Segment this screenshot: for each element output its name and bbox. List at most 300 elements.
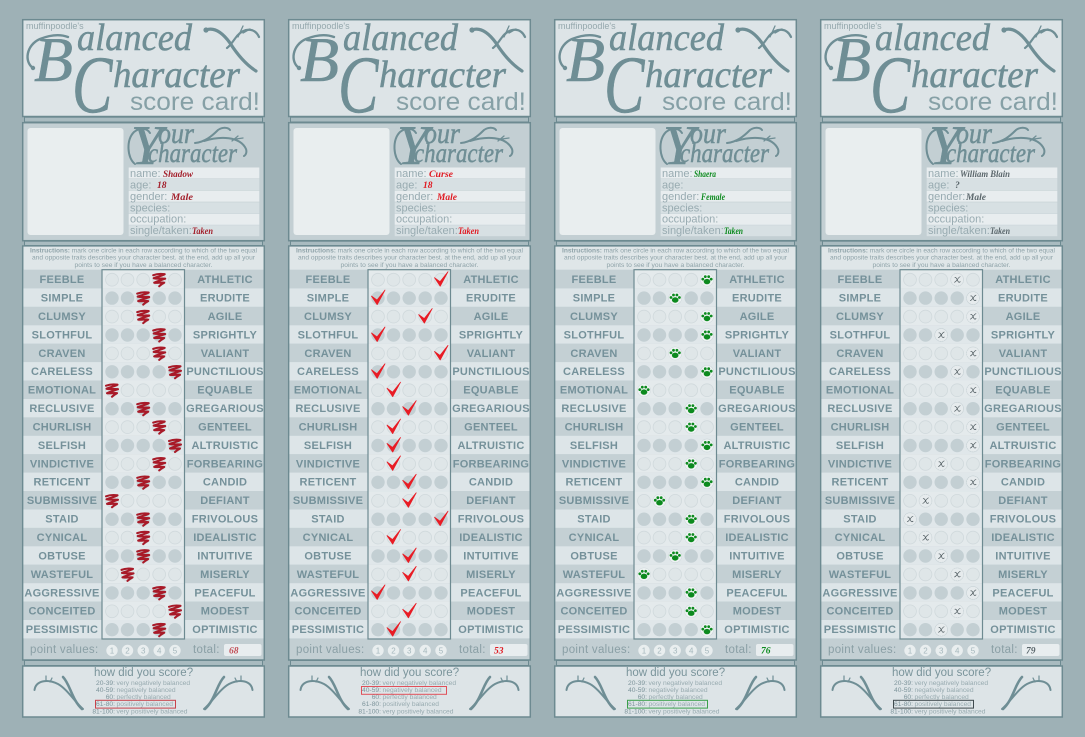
row: SIMPLE ERUDITE: ERUDITE <box>200 293 250 305</box>
score ranges: 60: <box>638 694 647 701</box>
row: CHURLISH GENTEEL: GENTEEL <box>198 422 252 434</box>
character fields: species: <box>662 202 702 214</box>
title: Balanced Character <box>28 17 240 130</box>
score ranges <box>358 680 456 715</box>
instructions: and opposite traits describes your character best. at the end, add up all your <box>298 255 521 262</box>
icon: left flourish <box>832 676 881 709</box>
row: CHURLISH GENTEEL: GENTEEL <box>996 422 1050 434</box>
row: CONCEITED MODEST <box>289 602 530 620</box>
row: CARELESS PUNCTILIOUS: PUNCTILIOUS <box>452 366 530 378</box>
score ranges: 60: <box>106 694 115 701</box>
character fields: name: <box>662 168 693 180</box>
row: CLUMSY AGILE: AGILE <box>1006 311 1040 323</box>
row: WASTEFUL MISERLY: WASTEFUL <box>829 569 891 581</box>
character fields: age: <box>928 180 949 192</box>
row: SLOTHFUL SPRIGHTLY <box>289 325 530 344</box>
subtitle: score card!: score card! <box>396 88 526 116</box>
row: CLUMSY AGILE <box>821 307 1062 325</box>
row: CARELESS PUNCTILIOUS: CARELESS <box>297 366 359 378</box>
row: SUBMISSIVE DEFIANT: SUBMISSIVE <box>825 495 895 507</box>
row: SUBMISSIVE DEFIANT <box>289 491 530 510</box>
icon: header flourish <box>1001 26 1057 71</box>
point values and total: 1 <box>642 646 647 656</box>
row: SLOTHFUL SPRIGHTLY: SPRIGHTLY <box>991 329 1056 341</box>
row: SUBMISSIVE DEFIANT <box>821 491 1062 510</box>
icon: header flourish <box>735 26 791 71</box>
card 3: Shaera <box>555 17 796 717</box>
row: FEEBLE ATHLETIC: FEEBLE <box>306 274 350 286</box>
row: AGGRESSIVE PEACEFUL <box>23 583 264 602</box>
row: STAID FRIVOLOUS <box>289 510 530 528</box>
point values and total: 5 <box>173 646 178 656</box>
row: CRAVEN VALIANT: CRAVEN <box>304 348 352 360</box>
heading: your character <box>394 115 512 177</box>
row: SIMPLE ERUDITE: SIMPLE <box>41 293 83 305</box>
character fields: gender: <box>396 191 433 203</box>
score ranges: 60: <box>372 694 381 701</box>
row: WASTEFUL MISERLY: WASTEFUL <box>31 569 93 581</box>
row: SELFISH ALTRUISTIC: ALTRUISTIC <box>191 440 259 452</box>
character fields: age: <box>130 180 151 192</box>
panel: scoring <box>821 246 1062 660</box>
row: CLUMSY AGILE <box>23 307 264 325</box>
title: Balanced Character: haracter <box>911 54 1038 96</box>
point values and total: 3 <box>407 646 412 656</box>
row: RECLUSIVE GREGARIOUS: RECLUSIVE <box>827 403 893 415</box>
row: RETICENT CANDID: RETICENT <box>566 477 623 489</box>
row: SELFISH ALTRUISTIC <box>23 436 264 454</box>
row: SELFISH ALTRUISTIC: SELFISH <box>38 440 86 452</box>
row: EMOTIONAL EQUABLE: EMOTIONAL <box>826 385 894 397</box>
point values and total: 3 <box>673 646 678 656</box>
row: SUBMISSIVE DEFIANT: DEFIANT <box>466 495 516 507</box>
row: CYNICAL IDEALISTIC: IDEALISTIC <box>725 532 789 544</box>
row: WASTEFUL MISERLY: MISERLY <box>466 569 516 581</box>
row: SLOTHFUL SPRIGHTLY: SLOTHFUL <box>830 329 890 341</box>
row: OBTUSE INTUITIVE: OBTUSE <box>836 550 884 562</box>
instructions: points to see if you have a balanced character. <box>606 262 745 269</box>
score ranges: 20-39: <box>894 680 913 687</box>
row: STAID FRIVOLOUS: FRIVOLOUS <box>990 514 1056 526</box>
character fields: age: <box>396 180 417 192</box>
row: SIMPLE ERUDITE: SIMPLE <box>839 293 881 305</box>
subtitle: score card!: score card! <box>928 88 1058 116</box>
score ranges: negatively balanced <box>648 687 708 694</box>
row: CARELESS PUNCTILIOUS: CARELESS <box>829 366 891 378</box>
title: Balanced Character: haracter <box>645 54 772 96</box>
character fields: name: <box>928 168 959 180</box>
row: PESSIMISTIC OPTIMISTIC <box>821 620 1062 638</box>
point values and total: point values: <box>296 644 364 656</box>
point values and total: 53 <box>494 646 504 656</box>
row: AGGRESSIVE PEACEFUL: PEACEFUL <box>726 587 788 599</box>
score ranges: perfectly balanced <box>914 694 969 701</box>
row: CARELESS PUNCTILIOUS: CARELESS <box>31 366 93 378</box>
panel: header <box>23 17 264 130</box>
row: STAID FRIVOLOUS <box>555 510 796 528</box>
row: PESSIMISTIC OPTIMISTIC: PESSIMISTIC <box>292 624 364 636</box>
panel: how did you score <box>289 666 530 717</box>
point values and total: 5 <box>705 646 710 656</box>
point values and total <box>828 644 1060 656</box>
row: PESSIMISTIC OPTIMISTIC <box>289 620 530 638</box>
photo box <box>560 128 656 235</box>
panel: header: muffinpoodle's <box>558 21 616 31</box>
row: EMOTIONAL EQUABLE: EMOTIONAL <box>560 385 628 397</box>
point values and total: 3 <box>939 646 944 656</box>
character fields: name: <box>130 168 161 180</box>
character fields: Shadow <box>163 170 194 180</box>
score ranges: very negatively balanced <box>382 680 456 687</box>
row: AGGRESSIVE PEACEFUL: PEACEFUL <box>992 587 1054 599</box>
panel: your character <box>23 115 264 241</box>
row: SELFISH ALTRUISTIC <box>289 436 530 454</box>
row: SELFISH ALTRUISTIC: ALTRUISTIC <box>989 440 1057 452</box>
row: RECLUSIVE GREGARIOUS: RECLUSIVE <box>295 403 361 415</box>
row: SIMPLE ERUDITE <box>555 288 796 307</box>
title: Balanced Character: B <box>832 24 871 95</box>
panel: your character <box>555 115 796 241</box>
row: EMOTIONAL EQUABLE <box>555 380 796 399</box>
row: SIMPLE ERUDITE: SIMPLE <box>573 293 615 305</box>
score ranges: perfectly balanced <box>382 694 437 701</box>
row: VINDICTIVE FORBEARING: FORBEARING <box>719 458 795 470</box>
row: PESSIMISTIC OPTIMISTIC: OPTIMISTIC <box>724 624 790 636</box>
subtitle: score card!: score card! <box>130 88 260 116</box>
icon: right flourish <box>204 676 252 709</box>
row: PESSIMISTIC OPTIMISTIC: PESSIMISTIC <box>26 624 98 636</box>
row: RETICENT CANDID: CANDID <box>469 477 513 489</box>
point values and total: total: <box>193 644 220 656</box>
panel: scoring <box>23 246 264 660</box>
row: VINDICTIVE FORBEARING <box>289 454 530 473</box>
character fields: species: <box>130 202 170 214</box>
title: Balanced Character: alanced <box>875 17 991 59</box>
panel: header: muffinpoodle's <box>824 21 882 31</box>
row: CYNICAL IDEALISTIC: IDEALISTIC <box>991 532 1055 544</box>
row: SELFISH ALTRUISTIC: ALTRUISTIC <box>457 440 525 452</box>
character fields: gender: <box>662 191 699 203</box>
row: WASTEFUL MISERLY: MISERLY <box>200 569 250 581</box>
point values and total: point values: <box>30 644 98 656</box>
row: OBTUSE INTUITIVE: OBTUSE <box>38 550 86 562</box>
point values and total: 1 <box>376 646 381 656</box>
card 1: Shadow <box>23 17 264 717</box>
row: PESSIMISTIC OPTIMISTIC: OPTIMISTIC <box>192 624 258 636</box>
row: EMOTIONAL EQUABLE: EQUABLE <box>995 385 1051 397</box>
row: RECLUSIVE GREGARIOUS <box>289 399 530 417</box>
row: CARELESS PUNCTILIOUS: PUNCTILIOUS <box>186 366 264 378</box>
row: CONCEITED MODEST: MODEST <box>201 606 249 618</box>
row: WASTEFUL MISERLY <box>821 565 1062 583</box>
row: CHURLISH GENTEEL: CHURLISH <box>831 422 889 434</box>
point values and total: 76 <box>761 646 771 656</box>
character fields: single/taken: <box>662 225 724 237</box>
point values and total: 4 <box>157 646 162 656</box>
row: CRAVEN VALIANT <box>821 344 1062 362</box>
row: SIMPLE ERUDITE <box>289 288 530 307</box>
character fields: Male <box>170 193 194 203</box>
row: SIMPLE ERUDITE <box>23 288 264 307</box>
instructions <box>828 248 1055 269</box>
row: SLOTHFUL SPRIGHTLY: SPRIGHTLY <box>459 329 524 341</box>
instructions: points to see if you have a balanced character. <box>872 262 1011 269</box>
score ranges: 61-80: <box>96 701 115 708</box>
row: SLOTHFUL SPRIGHTLY: SLOTHFUL <box>32 329 92 341</box>
score ranges: 20-39: <box>362 680 381 687</box>
row: SLOTHFUL SPRIGHTLY: SPRIGHTLY <box>193 329 258 341</box>
row: AGGRESSIVE PEACEFUL: PEACEFUL <box>460 587 522 599</box>
character fields: 18 <box>423 181 433 191</box>
row: CHURLISH GENTEEL: CHURLISH <box>565 422 623 434</box>
score ranges: positively balanced <box>116 701 173 708</box>
point values and total: 68 <box>229 646 239 656</box>
row: SELFISH ALTRUISTIC <box>555 436 796 454</box>
row: RECLUSIVE GREGARIOUS <box>23 399 264 417</box>
point values and total: 1 <box>908 646 913 656</box>
instructions <box>562 248 789 269</box>
instructions: and opposite traits describes your character best. at the end, add up all your <box>564 255 787 262</box>
row: CYNICAL IDEALISTIC: CYNICAL <box>569 532 619 544</box>
title: Balanced Character: B <box>566 24 605 95</box>
heading: your character: character <box>414 138 503 168</box>
point values and total: point values: <box>562 644 630 656</box>
row: EMOTIONAL EQUABLE: EQUABLE <box>463 385 519 397</box>
character fields: occupation: <box>396 214 452 226</box>
character fields: Taken <box>192 227 213 237</box>
row: CRAVEN VALIANT: VALIANT <box>467 348 515 360</box>
heading: your character: character <box>946 138 1035 168</box>
panel: how did you score <box>23 666 264 717</box>
heading: your character: our <box>158 117 194 150</box>
card 4: William Blain <box>821 17 1062 717</box>
title: Balanced Character: B <box>34 24 73 95</box>
row: CLUMSY AGILE: AGILE <box>208 311 242 323</box>
row: OBTUSE INTUITIVE: INTUITIVE <box>463 550 519 562</box>
icon: right flourish <box>736 676 784 709</box>
instructions <box>296 248 523 269</box>
row: FEEBLE ATHLETIC: FEEBLE <box>40 274 84 286</box>
character fields: Curse <box>429 170 454 180</box>
score ranges <box>624 680 722 715</box>
row: CYNICAL IDEALISTIC: CYNICAL <box>835 532 885 544</box>
character fields: single/taken: <box>396 225 458 237</box>
row: CHURLISH GENTEEL <box>23 417 264 436</box>
row: AGGRESSIVE PEACEFUL: AGGRESSIVE <box>24 587 100 599</box>
character fields: gender: <box>130 191 167 203</box>
instructions: Instructions: mark one circle in each row according to which of the two equal <box>296 248 523 254</box>
instructions: Instructions: mark one circle in each row according to which of the two equal <box>30 248 257 254</box>
row: CLUMSY AGILE <box>289 307 530 325</box>
row: SELFISH ALTRUISTIC: SELFISH <box>304 440 352 452</box>
character fields: occupation: <box>662 214 718 226</box>
row: CLUMSY AGILE <box>555 307 796 325</box>
character fields: 18 <box>157 181 167 191</box>
row: CRAVEN VALIANT: VALIANT <box>999 348 1047 360</box>
title: Balanced Character <box>826 17 1038 130</box>
row: OBTUSE INTUITIVE: INTUITIVE <box>995 550 1051 562</box>
heading: your character: Y <box>397 115 434 177</box>
row: VINDICTIVE FORBEARING: FORBEARING <box>453 458 529 470</box>
row: SIMPLE ERUDITE: ERUDITE <box>998 293 1048 305</box>
panel: your character <box>289 115 530 241</box>
row: STAID FRIVOLOUS <box>23 510 264 528</box>
row: CLUMSY AGILE: AGILE <box>474 311 508 323</box>
point values and total: 2 <box>125 646 130 656</box>
heading: your character: our <box>690 117 726 150</box>
point values and total: 4 <box>689 646 694 656</box>
row: PESSIMISTIC OPTIMISTIC: PESSIMISTIC <box>558 624 630 636</box>
panel: how did you score: how did you score? <box>94 667 193 679</box>
character fields <box>129 168 259 237</box>
title: Balanced Character: haracter <box>379 54 506 96</box>
row: FEEBLE ATHLETIC: ATHLETIC <box>729 274 785 286</box>
panel: how did you score: how did you score? <box>892 667 991 679</box>
row: VINDICTIVE FORBEARING <box>555 454 796 473</box>
character fields: age: <box>662 180 683 192</box>
row: VINDICTIVE FORBEARING: VINDICTIVE <box>828 458 892 470</box>
character fields: William Blain <box>960 170 1010 180</box>
score ranges: perfectly balanced <box>116 694 171 701</box>
row: SLOTHFUL SPRIGHTLY: SLOTHFUL <box>298 329 358 341</box>
row: CRAVEN VALIANT <box>23 344 264 362</box>
heading: your character: character <box>680 138 769 168</box>
title: Balanced Character: C <box>604 39 645 130</box>
row: AGGRESSIVE PEACEFUL <box>821 583 1062 602</box>
row: SELFISH ALTRUISTIC: SELFISH <box>836 440 884 452</box>
character fields: Female <box>700 193 726 203</box>
instructions: points to see if you have a balanced character. <box>74 262 213 269</box>
character fields: Shaera <box>694 170 716 180</box>
row: CRAVEN VALIANT: VALIANT <box>733 348 781 360</box>
row: AGGRESSIVE PEACEFUL: AGGRESSIVE <box>822 587 898 599</box>
row: RECLUSIVE GREGARIOUS: GREGARIOUS <box>186 403 264 415</box>
row: CHURLISH GENTEEL: CHURLISH <box>299 422 357 434</box>
row: STAID FRIVOLOUS: STAID <box>577 514 611 526</box>
row: STAID FRIVOLOUS: STAID <box>843 514 877 526</box>
character fields: Taken <box>990 227 1010 237</box>
row: RETICENT CANDID <box>289 473 530 491</box>
row: FEEBLE ATHLETIC: FEEBLE <box>572 274 616 286</box>
row: WASTEFUL MISERLY <box>23 565 264 583</box>
panel: header: muffinpoodle's <box>292 21 350 31</box>
row: CARELESS PUNCTILIOUS <box>289 362 530 380</box>
row: RETICENT CANDID <box>555 473 796 491</box>
panel: scoring <box>555 246 796 660</box>
row: CRAVEN VALIANT <box>555 344 796 362</box>
row: SELFISH ALTRUISTIC <box>821 436 1062 454</box>
row: CRAVEN VALIANT: CRAVEN <box>836 348 884 360</box>
row: RETICENT CANDID: CANDID <box>203 477 247 489</box>
row: AGGRESSIVE PEACEFUL: PEACEFUL <box>194 587 256 599</box>
row: FEEBLE ATHLETIC: ATHLETIC <box>197 274 253 286</box>
row: PESSIMISTIC OPTIMISTIC <box>23 620 264 638</box>
point values and total: total: <box>725 644 752 656</box>
row: OBTUSE INTUITIVE: OBTUSE <box>304 550 352 562</box>
row: CONCEITED MODEST <box>23 602 264 620</box>
title: Balanced Character: haracter <box>113 54 240 96</box>
row: CHURLISH GENTEEL <box>289 417 530 436</box>
title: Balanced Character: B <box>300 24 339 95</box>
row: STAID FRIVOLOUS: STAID <box>311 514 345 526</box>
panel: header <box>555 17 796 130</box>
row: OBTUSE INTUITIVE <box>289 546 530 565</box>
row: RETICENT CANDID: RETICENT <box>34 477 91 489</box>
heading: your character: Y <box>131 115 168 177</box>
row: VINDICTIVE FORBEARING <box>821 454 1062 473</box>
title: Balanced Character: alanced <box>609 17 725 59</box>
row: STAID FRIVOLOUS: FRIVOLOUS <box>192 514 258 526</box>
row: SUBMISSIVE DEFIANT: SUBMISSIVE <box>559 495 629 507</box>
point values and total: 2 <box>657 646 662 656</box>
point values and total: total: <box>991 644 1018 656</box>
row: RETICENT CANDID <box>23 473 264 491</box>
character fields: single/taken: <box>928 225 990 237</box>
score ranges: very positively balanced <box>116 708 188 715</box>
character fields: Male <box>436 193 458 203</box>
heading: your character <box>660 115 778 177</box>
score ranges: very negatively balanced <box>914 680 988 687</box>
panel: scoring <box>289 246 530 660</box>
score ranges: 40-59: <box>362 687 381 694</box>
score ranges: perfectly balanced <box>648 694 703 701</box>
row: CHURLISH GENTEEL: GENTEEL <box>464 422 518 434</box>
row: RETICENT CANDID <box>821 473 1062 491</box>
row: SELFISH ALTRUISTIC: ALTRUISTIC <box>723 440 791 452</box>
icon: right flourish <box>470 676 518 709</box>
row: CRAVEN VALIANT: CRAVEN <box>38 348 86 360</box>
row: STAID FRIVOLOUS: FRIVOLOUS <box>724 514 790 526</box>
row: CYNICAL IDEALISTIC: IDEALISTIC <box>193 532 257 544</box>
icon: left flourish <box>566 676 615 709</box>
row: FEEBLE ATHLETIC <box>555 270 796 288</box>
heading: your character: our <box>424 117 460 150</box>
row: SUBMISSIVE DEFIANT: DEFIANT <box>732 495 782 507</box>
row: SIMPLE ERUDITE: ERUDITE <box>732 293 782 305</box>
score ranges: 81-100: <box>890 708 913 715</box>
row: AGGRESSIVE PEACEFUL <box>289 583 530 602</box>
title: Balanced Character: C <box>72 39 113 130</box>
row: PESSIMISTIC OPTIMISTIC: OPTIMISTIC <box>990 624 1056 636</box>
score ranges: negatively balanced <box>382 687 442 694</box>
row: SUBMISSIVE DEFIANT: DEFIANT <box>200 495 250 507</box>
photo box <box>294 128 390 235</box>
panel: how did you score <box>555 666 796 717</box>
row: AGGRESSIVE PEACEFUL: AGGRESSIVE <box>556 587 632 599</box>
score ranges: 61-80: <box>894 701 913 708</box>
row: CARELESS PUNCTILIOUS: PUNCTILIOUS <box>718 366 796 378</box>
title: Balanced Character: alanced <box>77 17 193 59</box>
point values and total <box>30 644 262 656</box>
point values and total: 4 <box>423 646 428 656</box>
score ranges: very positively balanced <box>648 708 720 715</box>
row: CHURLISH GENTEEL <box>821 417 1062 436</box>
row: CRAVEN VALIANT: VALIANT <box>201 348 249 360</box>
panel: header <box>289 17 530 130</box>
row: CYNICAL IDEALISTIC <box>821 528 1062 546</box>
score ranges: 60: <box>904 694 913 701</box>
row: CYNICAL IDEALISTIC: IDEALISTIC <box>459 532 523 544</box>
instructions: and opposite traits describes your character best. at the end, add up all your <box>32 255 255 262</box>
icon: right flourish <box>1002 676 1050 709</box>
instructions <box>30 248 257 269</box>
row: RETICENT CANDID: RETICENT <box>300 477 357 489</box>
point values and total: point values: <box>828 644 896 656</box>
row: VINDICTIVE FORBEARING: VINDICTIVE <box>562 458 626 470</box>
row: CHURLISH GENTEEL: GENTEEL <box>730 422 784 434</box>
row: CONCEITED MODEST: MODEST <box>467 606 515 618</box>
subtitle: score card!: score card! <box>662 88 792 116</box>
